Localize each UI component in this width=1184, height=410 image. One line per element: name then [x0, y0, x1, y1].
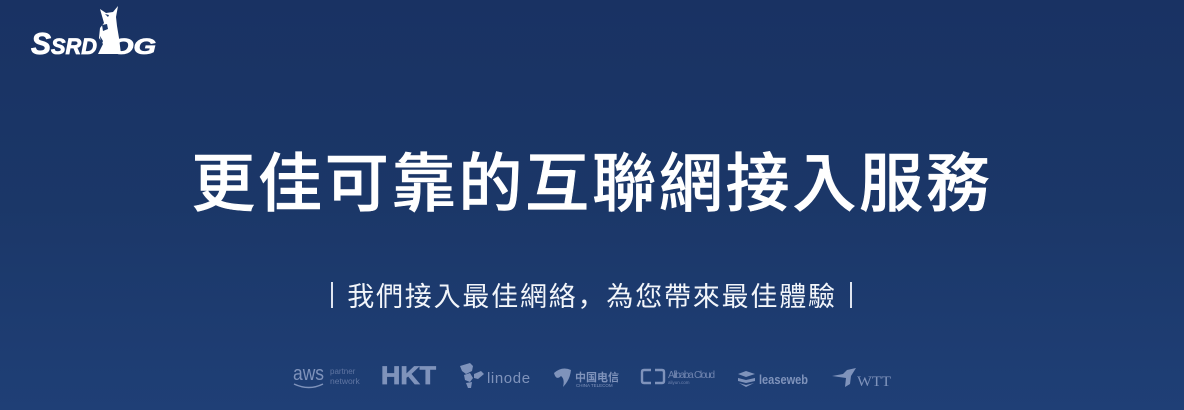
- logo: WTT: [832, 368, 891, 390]
- logo: leaseweb: leaseweb: [759, 372, 808, 387]
- icon: dog: [98, 6, 121, 54]
- subtitle left bar: [331, 282, 333, 308]
- logo: aws partner network: aws: [293, 363, 324, 385]
- logo: Alibaba Cloud: Alibaba Cloud: [668, 370, 715, 381]
- logo: China Telecom: CHINA TELECOM: [576, 383, 613, 388]
- title: 更佳可靠的互聯網接入服務: [191, 148, 993, 220]
- logo: Alibaba Cloud: [642, 370, 715, 385]
- partner logos: [293, 362, 891, 390]
- subtitle: 我們接入最佳網絡，為您帶來最佳體驗: [347, 275, 837, 314]
- logo wordmark: S: [31, 26, 51, 60]
- logo: aws partner network: [293, 363, 361, 388]
- logo: HKT: HKT: [381, 362, 436, 390]
- logo: aws partner network: network: [330, 376, 361, 386]
- subtitle right bar: [850, 282, 852, 308]
- logo: China Telecom: [554, 369, 619, 388]
- logo: Alibaba Cloud: aliyun.com: [668, 380, 690, 385]
- logo: linode: [460, 363, 531, 388]
- logo: linode: linode: [487, 370, 531, 387]
- logo wordmark: OG: [111, 34, 156, 59]
- logo: aws partner network: partner: [330, 367, 356, 376]
- logo: SsrDog: [30, 6, 156, 60]
- logo wordmark: SRD: [51, 34, 97, 59]
- logo wordmark: [31, 26, 156, 61]
- logo: WTT: WTT: [857, 374, 891, 390]
- logo: China Telecom: 中国电信: [575, 369, 619, 385]
- logo: leaseweb: [738, 371, 808, 387]
